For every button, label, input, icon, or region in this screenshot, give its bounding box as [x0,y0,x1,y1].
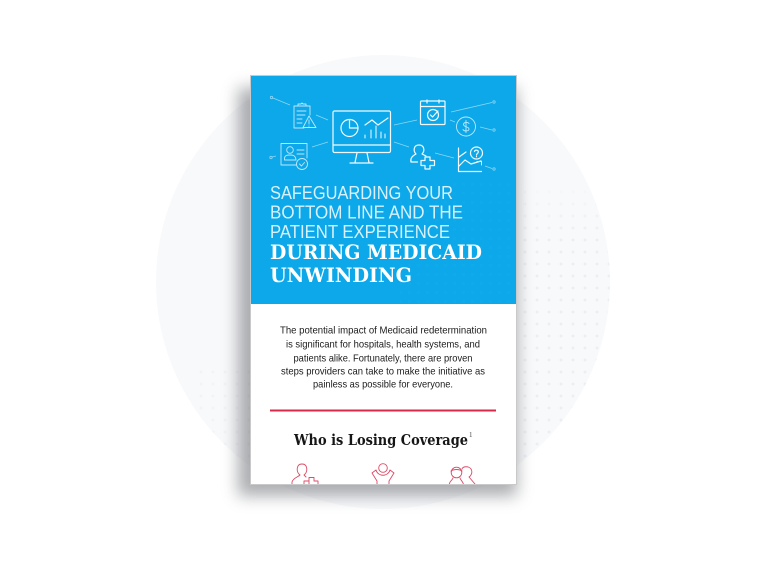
heading: who is losing coverage: Who is Losing Coverage [293,432,468,449]
connector lines [270,96,495,170]
card shadow [238,88,517,496]
icon: line chart with question [458,147,482,172]
icon: clipboard with warning [294,103,316,128]
icon: two people red [449,467,475,486]
panel: blue header [251,76,516,304]
title: PATIENT EXPERIENCE [270,221,450,242]
icon: ID card with check [281,144,308,170]
divider [270,410,496,412]
icon: calendar with check [420,100,445,124]
background circle [200,190,610,458]
icon: monitor dashboard [333,111,390,163]
title: SAFEGUARDING YOUR [270,182,453,203]
intro text: patients alike. Fortunately, there are proven [294,354,473,364]
icons: coverage groups [292,464,475,486]
title: BOTTOM LINE AND THE [270,202,463,222]
intro text [280,326,487,390]
heading: who is losing coverage: 1 [469,431,473,439]
intro text: steps providers can take to make the initiative as [281,366,485,378]
intro text: painless as possible for everyone. [313,380,453,390]
intro text: The potential impact of Medicaid redetermination [280,326,487,336]
infographic card [250,76,516,486]
icon: person raising arms red [372,464,394,486]
title: DURING MEDICAID [270,240,482,264]
title [270,182,482,287]
icon: dollar coin [456,117,476,136]
intro text: is significant for hospitals, health systems, and [286,340,480,350]
title: UNWINDING [270,263,412,287]
icon: person with plus red [292,464,318,486]
icon: person with plus [411,145,434,169]
